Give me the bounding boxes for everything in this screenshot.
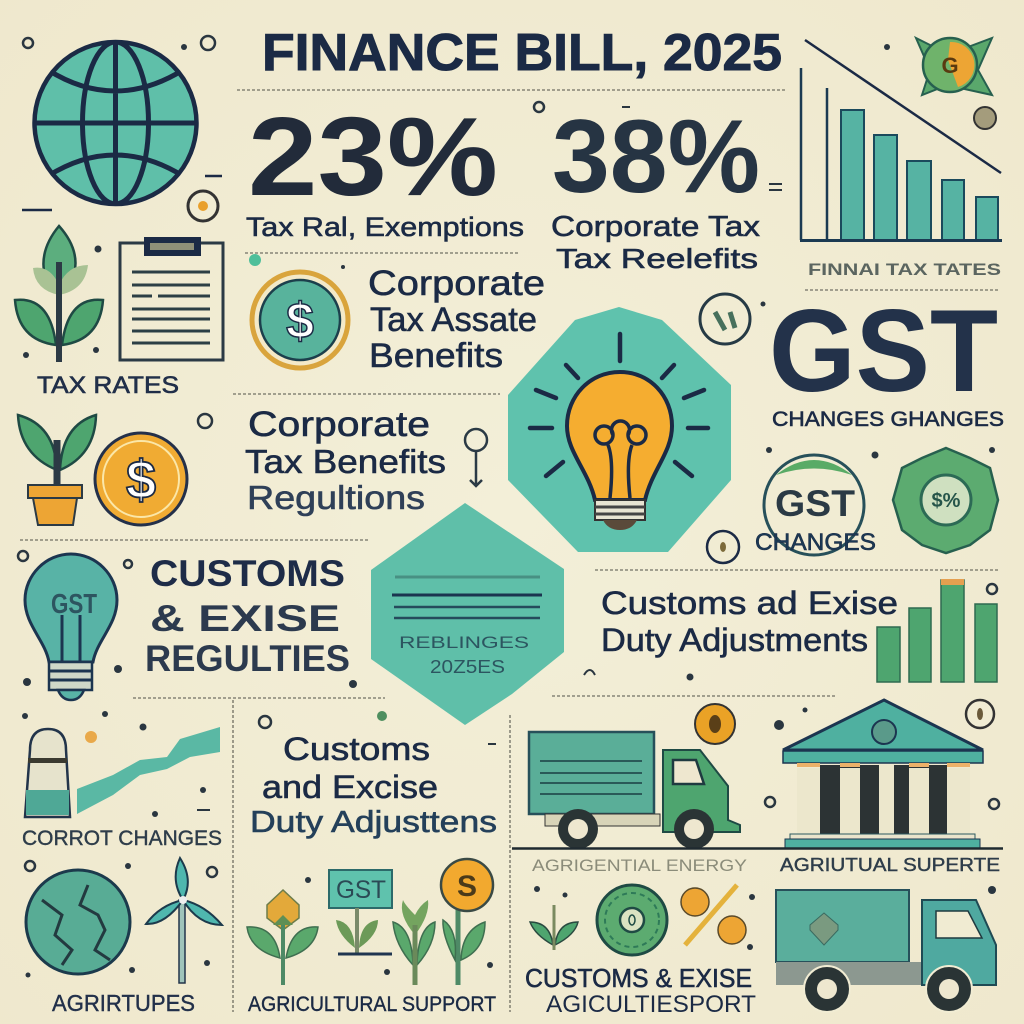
- label: agriutual superte: AGRIUTUAL SUPERTE: [780, 855, 1000, 875]
- stat: 38 percent: [551, 99, 761, 274]
- label: agrigential energy: AGRIGENTIAL ENERGY: [532, 856, 747, 875]
- text block: corporate tax assate benefits: Tax Assate: [370, 301, 537, 339]
- title: FINANCE BILL, 2025: [262, 24, 782, 82]
- icon: small circle emblem: [700, 294, 750, 344]
- icon: GST badge: G: [941, 53, 959, 78]
- bar chart: green bars: [877, 579, 997, 682]
- icon: GST lightbulb: GST: [51, 588, 97, 619]
- text block: customs and excise duty adjustments: [250, 731, 497, 839]
- icon: ring marker: [966, 700, 994, 728]
- text block: customs and exise agricultiesport: CUSTOMS & EXISE: [525, 963, 752, 993]
- panel: hexagon document: [371, 503, 564, 725]
- text block: corporate tax benefits regulations: Corporate: [248, 405, 430, 444]
- label: agrirtupes: AGRIRTUPES: [52, 990, 195, 1016]
- heading: GST: GST: [769, 285, 998, 416]
- ground line: [512, 847, 1003, 850]
- text block: customs and excise duty adjustments: Duty Adjusttens: [250, 804, 497, 839]
- icon: dollar coin teal: [252, 272, 348, 368]
- icon: plant in pot: [18, 415, 96, 525]
- icon: green wreath: [893, 448, 998, 553]
- icon: coin plant: S: [457, 870, 477, 903]
- icon: globe: [22, 40, 222, 221]
- stat: 23 percent: [246, 95, 524, 242]
- icon: tower and growth area: [25, 727, 220, 817]
- icon: green truck: [529, 732, 740, 849]
- icon: GST lightbulb: [25, 554, 117, 700]
- icon: teal truck: [776, 890, 996, 1012]
- icon: green wreath: $%: [932, 490, 961, 512]
- text block: corporate tax benefits regulations: Tax Benefits: [245, 443, 446, 480]
- stat: 38 percent: 38%: [552, 99, 760, 215]
- icon: young plant: [393, 900, 435, 985]
- text block: customs and excise duty adjustments: and Excise: [262, 769, 438, 805]
- icon: dollar coin teal: $: [286, 293, 314, 349]
- label: changes: CHANGES: [755, 529, 876, 556]
- icon: wind turbine: [146, 858, 222, 983]
- icon: green medallion: [597, 885, 667, 955]
- hexagon text: REBLINGES: [399, 633, 529, 652]
- panel: hexagon document: 20Z5ES: [430, 657, 505, 677]
- text block: customs and exise duty adjustments: Duty Adjustments: [601, 622, 868, 658]
- label: corrot changes: CORROT CHANGES: [22, 827, 222, 850]
- text block: customs and exise duty adjustments: Customs ad Exise: [601, 585, 898, 621]
- icon: earth: [26, 870, 130, 974]
- stat caption: Corporate Tax: [551, 211, 761, 243]
- text block: customs and excise duty adjustments: Customs: [283, 731, 430, 767]
- text block: customs and exise regulties: & EXISE: [150, 598, 340, 639]
- stat caption: Tax Ral, Exemptions: [246, 212, 524, 242]
- icon: small circle marker: [707, 531, 739, 563]
- icon: GST sign plant: GST: [336, 876, 386, 904]
- text block: customs and exise agricultiesport: AGICULTIESPORT: [546, 991, 756, 1018]
- icon: flower plant: [247, 890, 318, 985]
- text block: customs and exise agricultiesport: [525, 963, 756, 1018]
- icon: percent symbol: [681, 885, 746, 945]
- icon: small sprout: [530, 905, 578, 950]
- text block: customs and exise regulties: REGULTIES: [145, 638, 350, 679]
- text block: corporate tax benefits regulations: Regultions: [247, 479, 425, 516]
- icon: bank building: [783, 700, 983, 848]
- label: agricultural support: AGRICULTURAL SUPPORT: [248, 993, 496, 1016]
- label: tax rates: TAX RATES: [37, 372, 179, 399]
- icon: small key: [465, 429, 487, 486]
- label: changes changes: CHANGES GHANGES: [772, 408, 1004, 431]
- bar chart: tax rates: [800, 40, 1002, 279]
- icon: GST badge: [916, 38, 996, 129]
- icon: GST circle: GST: [775, 483, 855, 524]
- chart label: FINNAI TAX TATES: [808, 260, 1001, 279]
- panel: central lightbulb: [508, 307, 731, 552]
- icon: GST sign plant: [329, 870, 392, 955]
- icon: orange coin: [695, 704, 735, 744]
- icon: dollar coin orange: $: [126, 450, 156, 510]
- icon: coin plant: [441, 859, 493, 985]
- text block: corporate tax benefits regulations: [245, 405, 446, 516]
- text block: corporate tax assate benefits: Benefits: [369, 337, 503, 375]
- stat: 38 percent: Tax Reelefits: [556, 243, 758, 274]
- text block: corporate tax assate benefits: [368, 264, 545, 375]
- icon: plant: [15, 226, 103, 362]
- stat: 23 percent: 23%: [248, 95, 498, 219]
- text block: customs and exise regulties: [145, 553, 350, 679]
- text block: customs and exise regulties: CUSTOMS: [150, 553, 345, 594]
- icon: dollar coin orange: [95, 433, 187, 525]
- icon: GST circle: [764, 455, 864, 555]
- icon: clipboard document: [120, 237, 223, 360]
- text block: corporate tax assate benefits: Corporate: [368, 264, 545, 303]
- text block: customs and exise duty adjustments: [601, 585, 898, 658]
